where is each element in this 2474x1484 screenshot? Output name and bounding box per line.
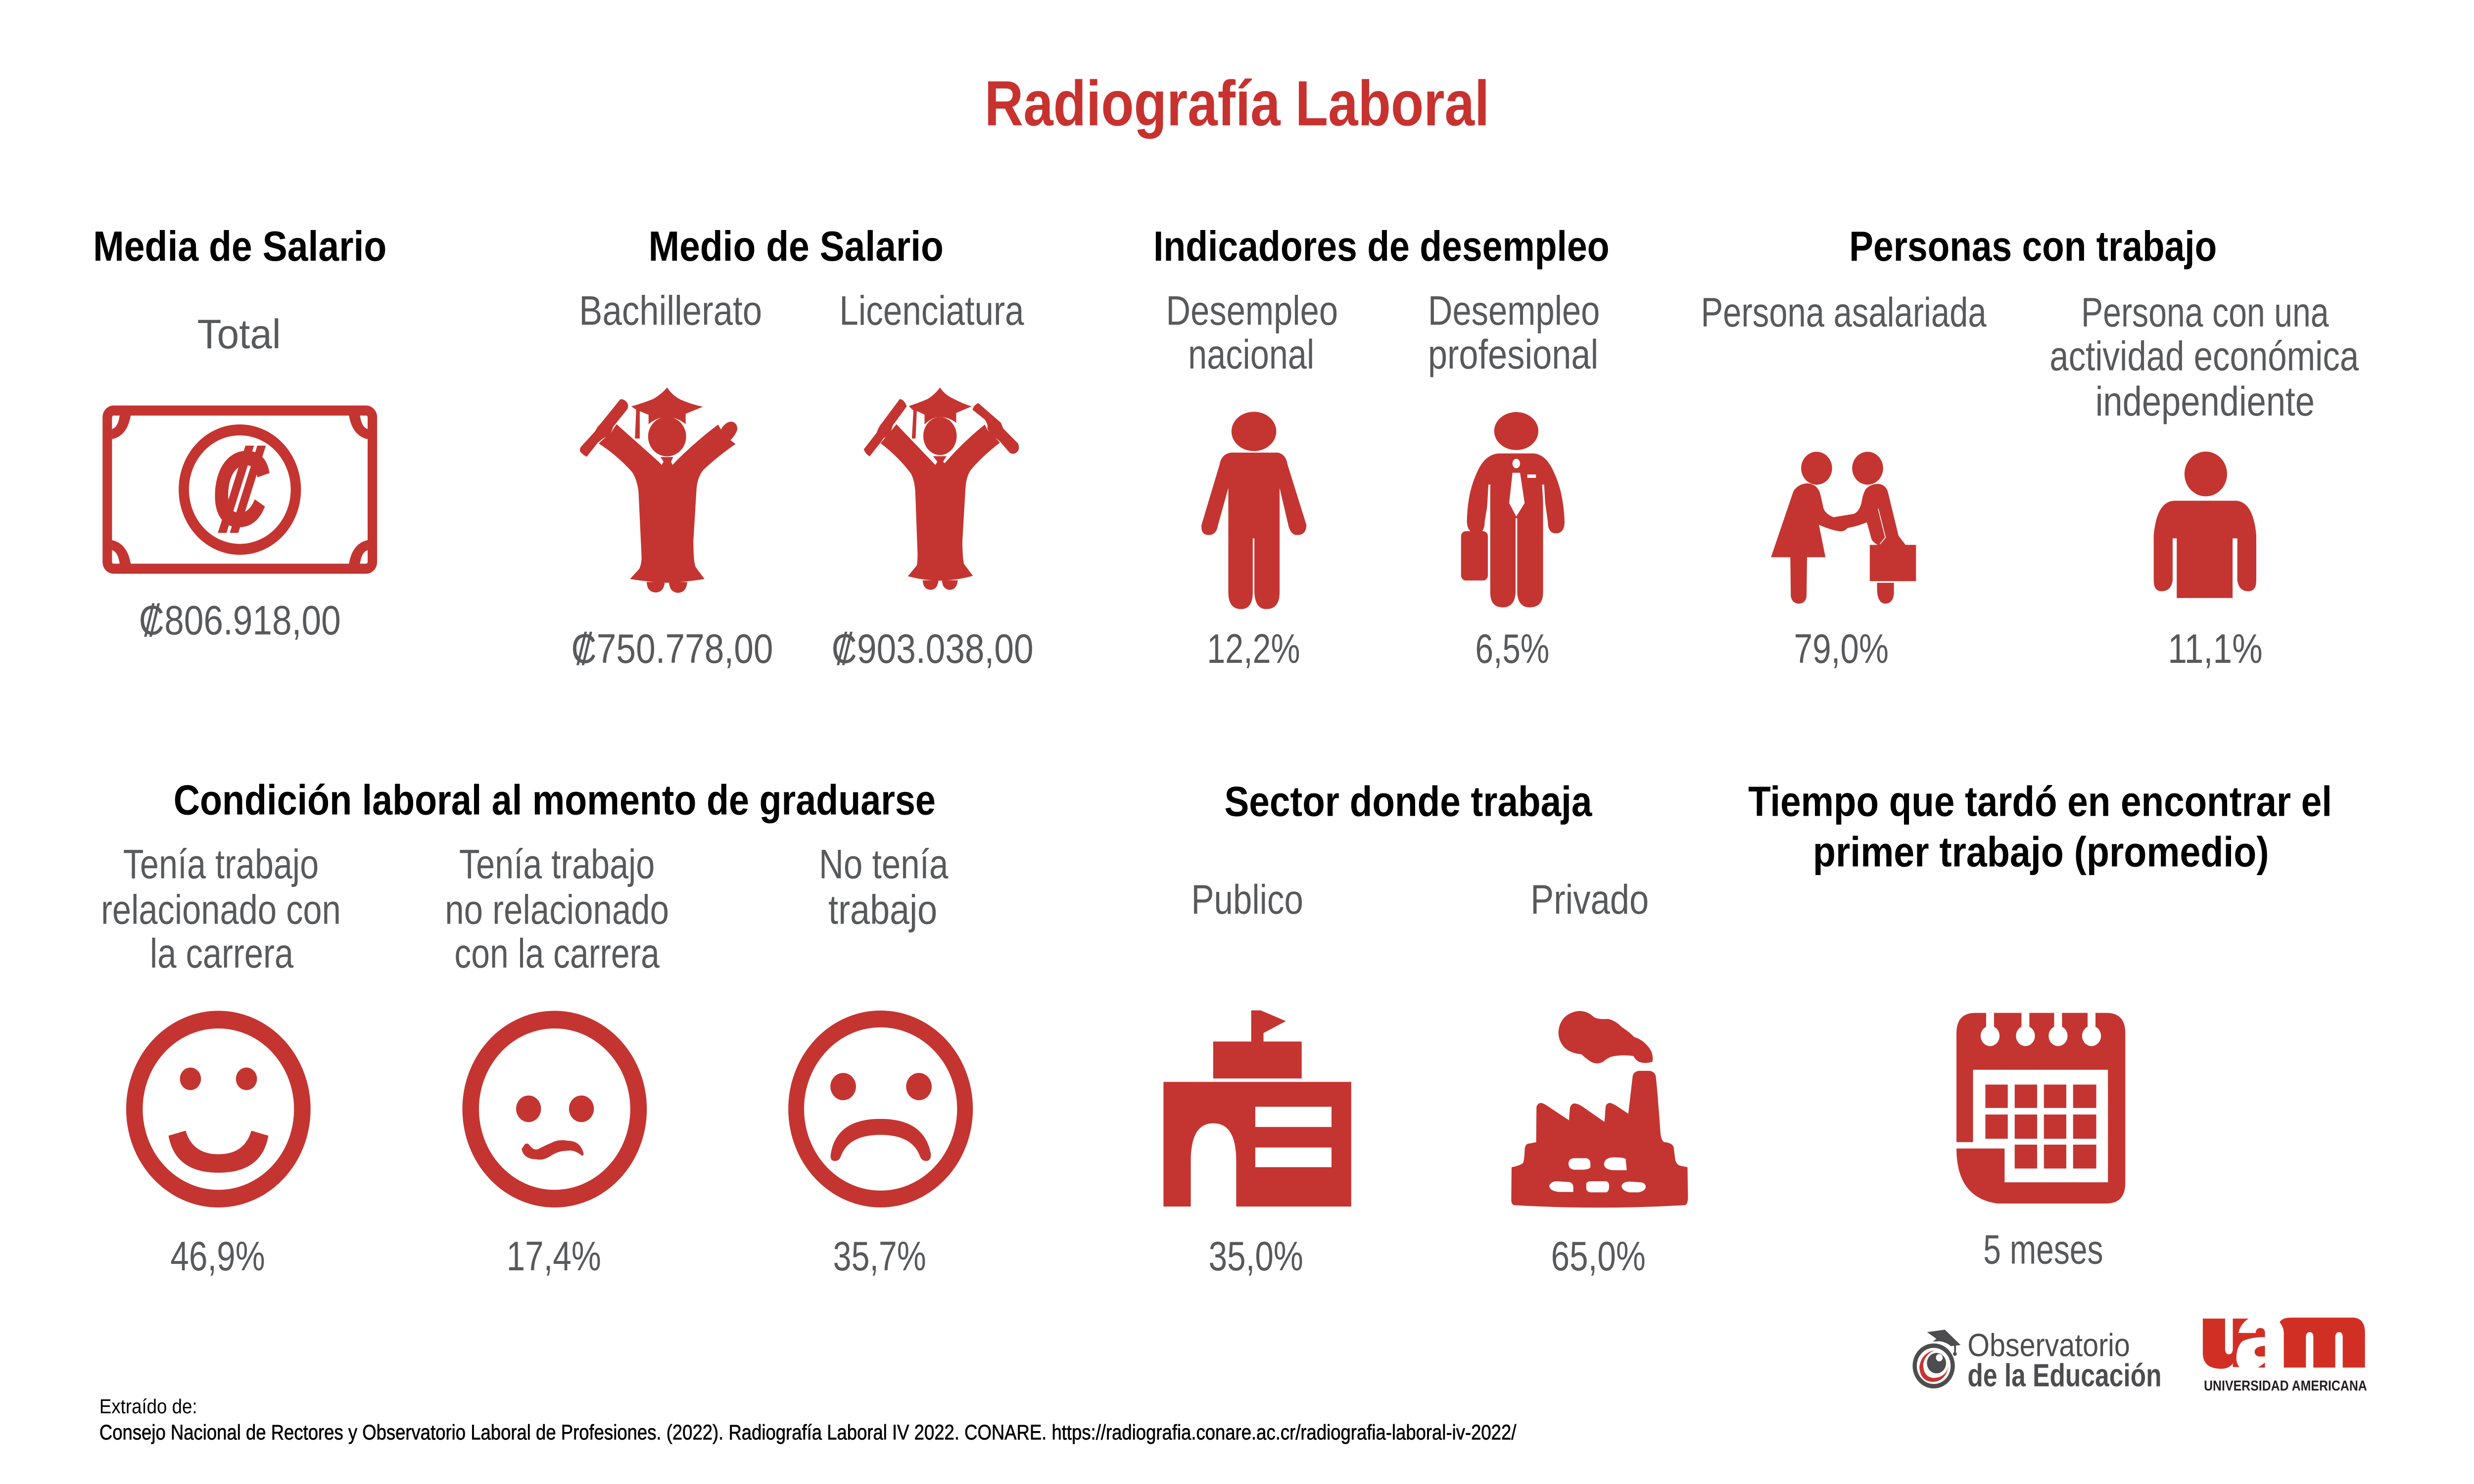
value: licenciatura salary: ₡903.038,00: [831, 626, 1034, 672]
heading: tiempo primer trabajo: primer trabajo (promedio): [1813, 829, 2269, 876]
label: desempleo nacional: nacional: [1188, 332, 1314, 377]
source citation: [99, 1395, 1517, 1444]
heading: tiempo primer trabajo: [1748, 778, 2332, 876]
panel: condicion laboral: [101, 777, 965, 1280]
label: persona independiente: actividad económica: [2049, 333, 2359, 379]
icon: neutral face: [471, 1020, 638, 1199]
label: persona independiente: independiente: [2095, 379, 2315, 425]
value: publico: 35,0%: [1209, 1234, 1303, 1280]
value: persona independiente: 11,1%: [2168, 626, 2263, 672]
icon: sad face: [796, 1019, 965, 1199]
icon: public building: [1163, 1011, 1351, 1206]
heading: media de salario: Media de Salario: [93, 223, 386, 270]
icon: calendar: [1956, 1013, 2125, 1204]
icon: person: [1201, 412, 1306, 609]
value: total salary: ₡806.918,00: [139, 598, 341, 644]
value: desempleo nacional: 12,2%: [1207, 626, 1300, 672]
label: total: Total: [197, 312, 281, 358]
label: desempleo profesional: [1428, 288, 1600, 377]
label: relacionado: la carrera: [150, 930, 293, 976]
panel: tiempo primer trabajo: [1748, 778, 2332, 1273]
icon: happy face: [135, 1020, 302, 1199]
value: tiempo: 5 meses: [1983, 1227, 2103, 1273]
label: no tenia trabajo: No tenía: [819, 841, 949, 887]
panel: media de salario: [93, 223, 386, 644]
logo: observatorio de la educacion: Observatorio: [1967, 1328, 2130, 1363]
label: no relacionado: con la carrera: [454, 930, 660, 976]
icon: graduate licenciatura: [864, 387, 1019, 590]
panel: personas con trabajo: [1701, 223, 2359, 672]
label: relacionado: [101, 841, 341, 976]
label: no tenia trabajo: trabajo: [828, 887, 937, 933]
value: relacionado: 46,9%: [170, 1234, 265, 1280]
heading: tiempo primer trabajo: Tiempo que tardó en encontrar el: [1748, 778, 2332, 825]
panel: medio de salario: [571, 223, 1034, 672]
icon: banknote: [107, 411, 373, 569]
panel: sector donde trabaja: [1163, 778, 1688, 1280]
value: no relacionado: 17,4%: [507, 1234, 601, 1280]
heading: indicadores de desempleo: Indicadores de desempleo: [1153, 223, 1610, 270]
label: publico: Publico: [1191, 877, 1303, 923]
heading: medio de salario: Medio de Salario: [649, 223, 944, 270]
label: privado: Privado: [1530, 877, 1649, 923]
heading: personas con trabajo: Personas con trabajo: [1849, 223, 2217, 270]
logo: observatorio de la educacion: [1915, 1328, 2162, 1393]
panel: indicadores de desempleo: [1153, 223, 1610, 672]
icon: factory: [1511, 1011, 1688, 1207]
label: desempleo nacional: [1166, 288, 1338, 377]
label: no tenia trabajo: [819, 841, 949, 933]
label: persona asalariada: Persona asalariada: [1701, 290, 1987, 335]
label: no relacionado: Tenía trabajo: [459, 841, 655, 887]
label: persona independiente: [2049, 290, 2359, 425]
value: persona asalariada: 79,0%: [1794, 626, 1889, 672]
source citation: Extraído de:: [99, 1395, 197, 1418]
title: Radiografía Laboral: [985, 68, 1489, 139]
value: desempleo profesional: 6,5%: [1475, 626, 1549, 672]
logo: observatorio de la educacion: de la Educación: [1967, 1358, 2162, 1393]
heading: condicion laboral: Condición laboral al momento de graduarse: [174, 777, 936, 824]
value: bachillerato salary: ₡750.778,00: [571, 626, 773, 672]
label: bachillerato: Bachillerato: [579, 288, 762, 334]
value: privado: 65,0%: [1551, 1234, 1646, 1280]
logo: universidad americana: [2203, 1318, 2367, 1393]
label: desempleo nacional: Desempleo: [1166, 288, 1338, 334]
label: relacionado: relacionado con: [101, 887, 341, 933]
icon: handshake: [1771, 452, 1916, 603]
icon: person in suit with briefcase: [1461, 412, 1565, 607]
label: persona independiente: Persona con una: [2081, 290, 2329, 335]
source citation: Consejo Nacional de Rectores y Observatorio Laboral de Profesiones. (2022). Radiografía Laboral IV 2022. CONARE. https://radiografia.conare.ac.cr/radiografia-laboral-iv-2022/: [99, 1421, 1517, 1444]
heading: sector donde trabaja: Sector donde trabaja: [1224, 778, 1593, 825]
logo: universidad americana: UNIVERSIDAD AMERICANA: [2204, 1378, 2367, 1393]
label: no relacionado: no relacionado: [445, 887, 669, 933]
label: no relacionado: [445, 841, 669, 976]
icon: graduate bachillerato: [580, 387, 737, 593]
value: no tenia trabajo: 35,7%: [833, 1234, 926, 1280]
label: desempleo profesional: Desempleo: [1428, 288, 1600, 334]
icon: person torso: [2154, 452, 2256, 598]
label: relacionado: Tenía trabajo: [123, 841, 319, 887]
icon: banknote: ₡: [212, 431, 268, 548]
label: licenciatura: Licenciatura: [839, 288, 1024, 334]
label: desempleo profesional: profesional: [1428, 332, 1598, 377]
